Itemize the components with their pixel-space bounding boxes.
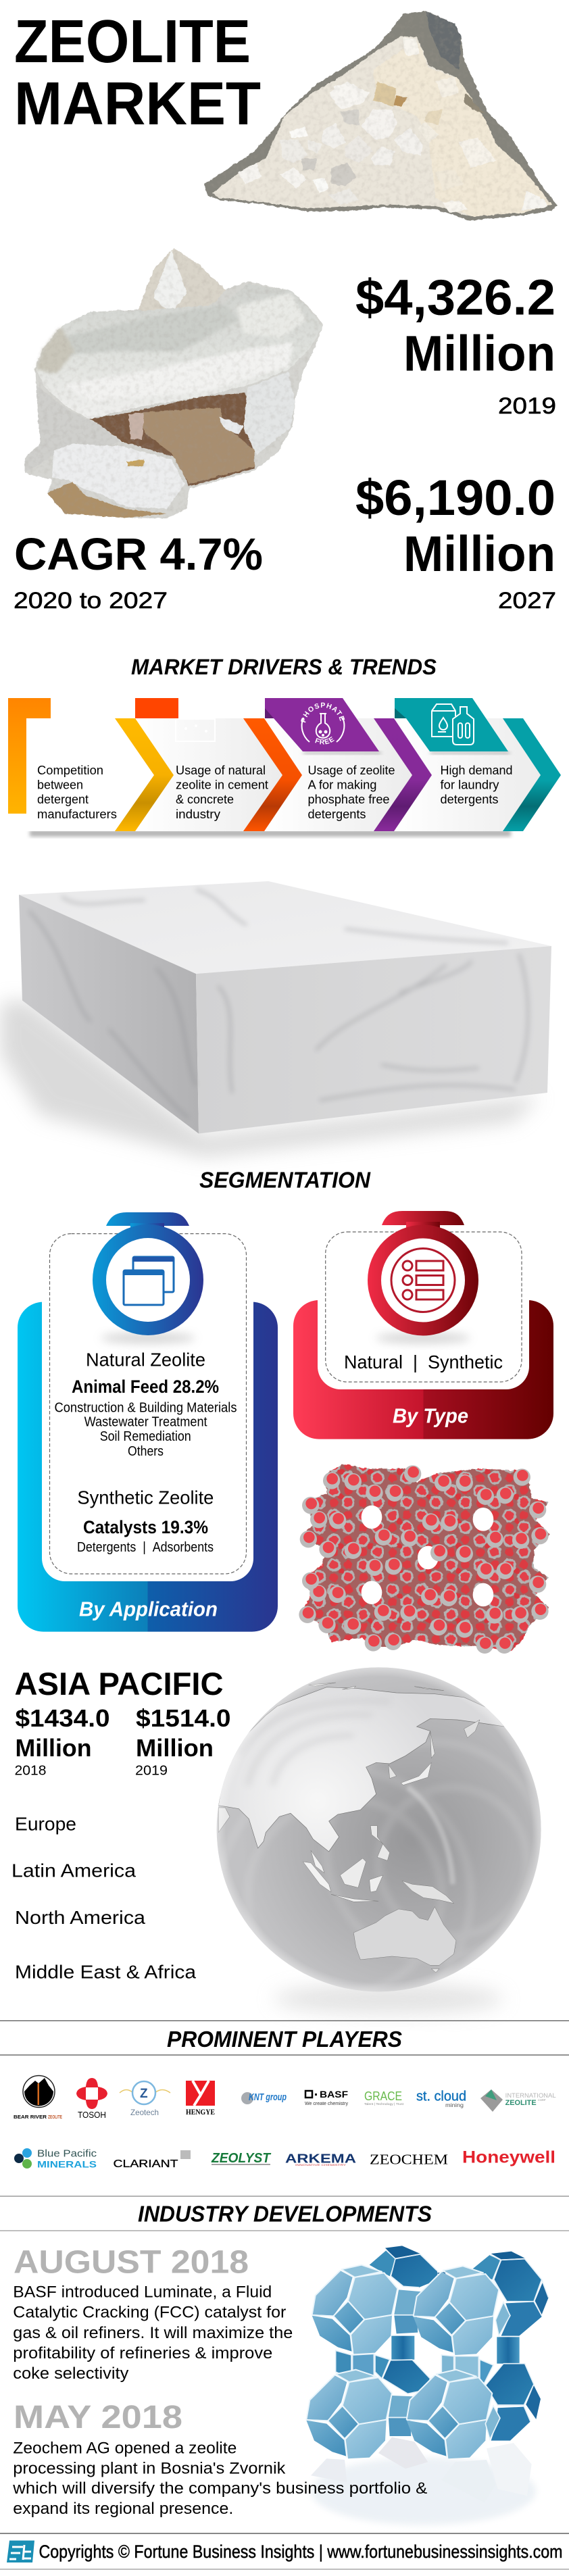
driver text: laundry demand: for laundry — [441, 778, 499, 792]
tab: purple phosphate free icon: PHOSPHATE — [301, 703, 345, 723]
segment text: synthetic zeolite: Detergents | Adsorbents — [77, 1540, 214, 1555]
driver text: cement and concrete: industry — [176, 808, 220, 821]
logo: hengye — [186, 2081, 215, 2116]
logo: zeolyst: ZEOLYST — [211, 2151, 272, 2166]
driver text: laundry demand: High demand — [441, 764, 512, 777]
driver text: phosphate free: Usage of zeolite — [308, 764, 395, 777]
logo: basf — [305, 2089, 348, 2106]
image: white fibrous zeolite mineral — [25, 248, 323, 518]
segment text: natural zeolite: Soil Remediation — [100, 1429, 191, 1444]
logo: zeotech: Z — [140, 2087, 148, 2101]
stat: asia pacific 2018: Million — [15, 1734, 92, 1762]
driver text: competition — [37, 764, 117, 821]
list: other regions: Europe — [15, 1814, 76, 1835]
logo: blue pacific minerals: MINERALS — [37, 2159, 97, 2170]
text: august 2018 development: profitability of refineries & improve — [13, 2344, 272, 2362]
heading: market drivers and trends: MARKET DRIVERS & TRENDS — [131, 655, 437, 679]
label: by application: By Application — [79, 1597, 218, 1621]
driver text: cement and concrete: zeolite in cement — [176, 778, 268, 792]
stat: 2027 market size — [355, 470, 556, 614]
driver text: cement and concrete: Usage of natural — [176, 764, 266, 777]
icon: fortune business insights logo — [7, 2541, 34, 2562]
footer — [7, 2541, 562, 2562]
logo: zeotech: Zeotech — [130, 2108, 159, 2117]
image: zeolite molecular framework — [299, 1464, 549, 1654]
panel: market drivers chevrons — [8, 698, 561, 839]
title: ZEOLITE — [14, 8, 251, 76]
logo: bear river zeolite — [14, 2076, 62, 2120]
logo: international zeolite: ZEOLITE — [505, 2099, 537, 2107]
logo: knt group: KNT group — [249, 2091, 287, 2103]
stat: asia pacific 2019: 2019 — [135, 1763, 168, 1778]
stat: 2027 market size: 2027 — [498, 588, 556, 614]
icon: faint concrete block — [176, 719, 215, 741]
logo: st cloud mining: mining — [445, 2102, 464, 2108]
heading: asia pacific: ASIA PACIFIC — [15, 1666, 223, 1702]
logo: zeochem: ZEOCHEM — [370, 2152, 448, 2168]
segment text: natural zeolite: Others — [128, 1444, 164, 1459]
logo: honeywell: Honeywell — [462, 2148, 555, 2167]
logo: basf: BASF — [320, 2089, 348, 2100]
text: august 2018 development: coke selectivity — [13, 2364, 128, 2383]
stat: 2019 market size: 2019 — [498, 393, 556, 419]
image: crystalline zeolite rock — [204, 11, 557, 221]
label: by type: By Type — [393, 1404, 468, 1428]
logo: zeotech — [120, 2081, 170, 2117]
tab: teal detergent icon — [395, 698, 511, 754]
segment text: type: Natural | Synthetic — [344, 1352, 503, 1372]
segment text: natural zeolite: Construction & Building Materials — [54, 1401, 237, 1416]
driver text: phosphate free: phosphate free — [308, 793, 389, 806]
stat: CAGR — [14, 529, 263, 614]
image: marble block — [0, 881, 551, 1157]
image: blue zeolite cage structure — [306, 2246, 549, 2525]
text: may 2018 development: which will diversify the company's business portfolio & — [12, 2479, 427, 2498]
logo: basf: We create chemistry — [305, 2102, 348, 2106]
driver text: phosphate free: A for making — [308, 778, 377, 792]
segment text: natural zeolite: Wastewater Treatment — [84, 1415, 207, 1430]
segment text: synthetic zeolite: Synthetic Zeolite — [77, 1487, 214, 1508]
logo: bear river zeolite: BEAR RIVER — [14, 2114, 47, 2120]
heading: industry developments: INDUSTRY DEVELOPMENTS — [138, 2201, 432, 2226]
stat: 2027 market size: Million — [403, 526, 555, 582]
logo: international zeolite: INTERNATIONAL — [505, 2092, 556, 2099]
stat: asia pacific 2018 — [15, 1704, 109, 1778]
logo: hengye: HENGYE — [186, 2107, 215, 2116]
logo: grace: Talent | Technology | Trust — [364, 2102, 404, 2106]
logo: tosoh — [76, 2078, 107, 2120]
stat: 2019 market size: Million — [403, 326, 555, 382]
heading: prominent players: PROMINENT PLAYERS — [167, 2027, 402, 2052]
logo: arkema: INNOVATIVE CHEMISTRY — [295, 2164, 347, 2166]
text: august 2018 development: Catalytic Cracking (FCC) catalyst for — [13, 2304, 286, 2322]
stat: asia pacific 2018: 2018 — [15, 1763, 46, 1778]
logo: international zeolite — [480, 2089, 556, 2112]
logo: knt group — [241, 2091, 287, 2104]
logo: arkema: ARKEMA — [285, 2152, 356, 2166]
logo: clariant — [114, 2150, 191, 2170]
text: may 2018 development: MAY 2018 — [14, 2400, 182, 2435]
stat: 2019 market size: $4,326.2 — [355, 270, 555, 326]
stat: CAGR: CAGR 4.7% — [14, 529, 263, 580]
logo: grace: GRACE — [364, 2089, 402, 2103]
panel: segmentation by type — [293, 1211, 553, 1439]
driver text: cement and concrete: & concrete — [176, 793, 234, 806]
driver text: cement and concrete — [176, 764, 268, 821]
driver text: laundry demand: detergents — [441, 793, 499, 806]
segment text: natural zeolite: Natural Zeolite — [86, 1349, 205, 1370]
icon: blue ribbon ring with windows — [93, 1212, 203, 1343]
stat: CAGR: 2020 to 2027 — [14, 588, 168, 614]
segment text: natural zeolite: Animal Feed 28.2% — [72, 1377, 219, 1397]
segment text: synthetic zeolite: Catalysts 19.3% — [83, 1517, 208, 1537]
stat: 2019 market size — [355, 270, 556, 419]
text: august 2018 development: BASF introduced Luminate, a Fluid — [13, 2283, 272, 2302]
text: august 2018 development: AUGUST 2018 — [14, 2245, 249, 2281]
panel: company logos — [14, 2076, 556, 2170]
text: august 2018 development — [13, 2245, 293, 2383]
text: may 2018 development: Zeochem AG opened a zeolite — [13, 2439, 237, 2458]
tab: purple phosphate free icon — [265, 698, 382, 756]
logo: tosoh: TOSOH — [78, 2110, 106, 2120]
text: august 2018 development: gas & oil refiners. It will maximize the — [13, 2324, 293, 2342]
logo: bear river zeolite: ZEOLITE — [48, 2114, 62, 2120]
segment text: synthetic zeolite — [77, 1487, 214, 1555]
stat: asia pacific 2019 — [135, 1704, 231, 1778]
list: other regions: Latin America — [11, 1860, 136, 1881]
list: other regions: Middle East & Africa — [15, 1961, 196, 1983]
logo: blue pacific minerals: Blue Pacific — [37, 2148, 97, 2160]
driver text: competition: Competition — [37, 764, 103, 777]
heading: segmentation: SEGMENTATION — [199, 1168, 371, 1193]
stat: asia pacific 2019: Million — [136, 1734, 214, 1762]
title: MARKET — [14, 70, 261, 138]
text: may 2018 development: processing plant in Bosnia's Zvornik — [13, 2460, 286, 2478]
logo: international zeolite: CORP — [538, 2098, 546, 2102]
panel: segmentation by application — [18, 1212, 278, 1632]
list: other regions: North America — [15, 1907, 145, 1928]
tab: purple phosphate free icon: FREE — [315, 737, 335, 745]
logo: blue pacific minerals — [14, 2148, 97, 2170]
title — [14, 8, 261, 138]
back lobes — [370, 2246, 549, 2441]
driver text: phosphate free: detergents — [308, 808, 366, 821]
text: may 2018 development — [12, 2400, 427, 2518]
front lobes — [312, 2265, 397, 2354]
driver text: laundry demand — [441, 764, 512, 806]
logo: st cloud mining: st. cloud — [416, 2089, 466, 2104]
driver text: phosphate free — [308, 764, 395, 821]
text: may 2018 development: expand its regional presence. — [13, 2500, 233, 2518]
stat: 2027 market size: $6,190.0 — [355, 470, 555, 526]
driver text: competition: manufacturers — [37, 808, 117, 821]
logo: clariant: CLARIANT — [114, 2158, 178, 2170]
stat: asia pacific 2018: $1434.0 — [15, 1704, 109, 1732]
stat: asia pacific 2019: $1514.0 — [136, 1704, 231, 1732]
driver text: competition: between — [37, 778, 83, 792]
list: other regions — [11, 1814, 196, 1983]
driver text: competition: detergent — [37, 793, 89, 806]
connector bands — [336, 2350, 493, 2383]
icon: red ribbon ring with list — [368, 1211, 478, 1343]
image: grey globe — [216, 1667, 543, 2022]
segment text: natural zeolite — [54, 1349, 237, 1459]
